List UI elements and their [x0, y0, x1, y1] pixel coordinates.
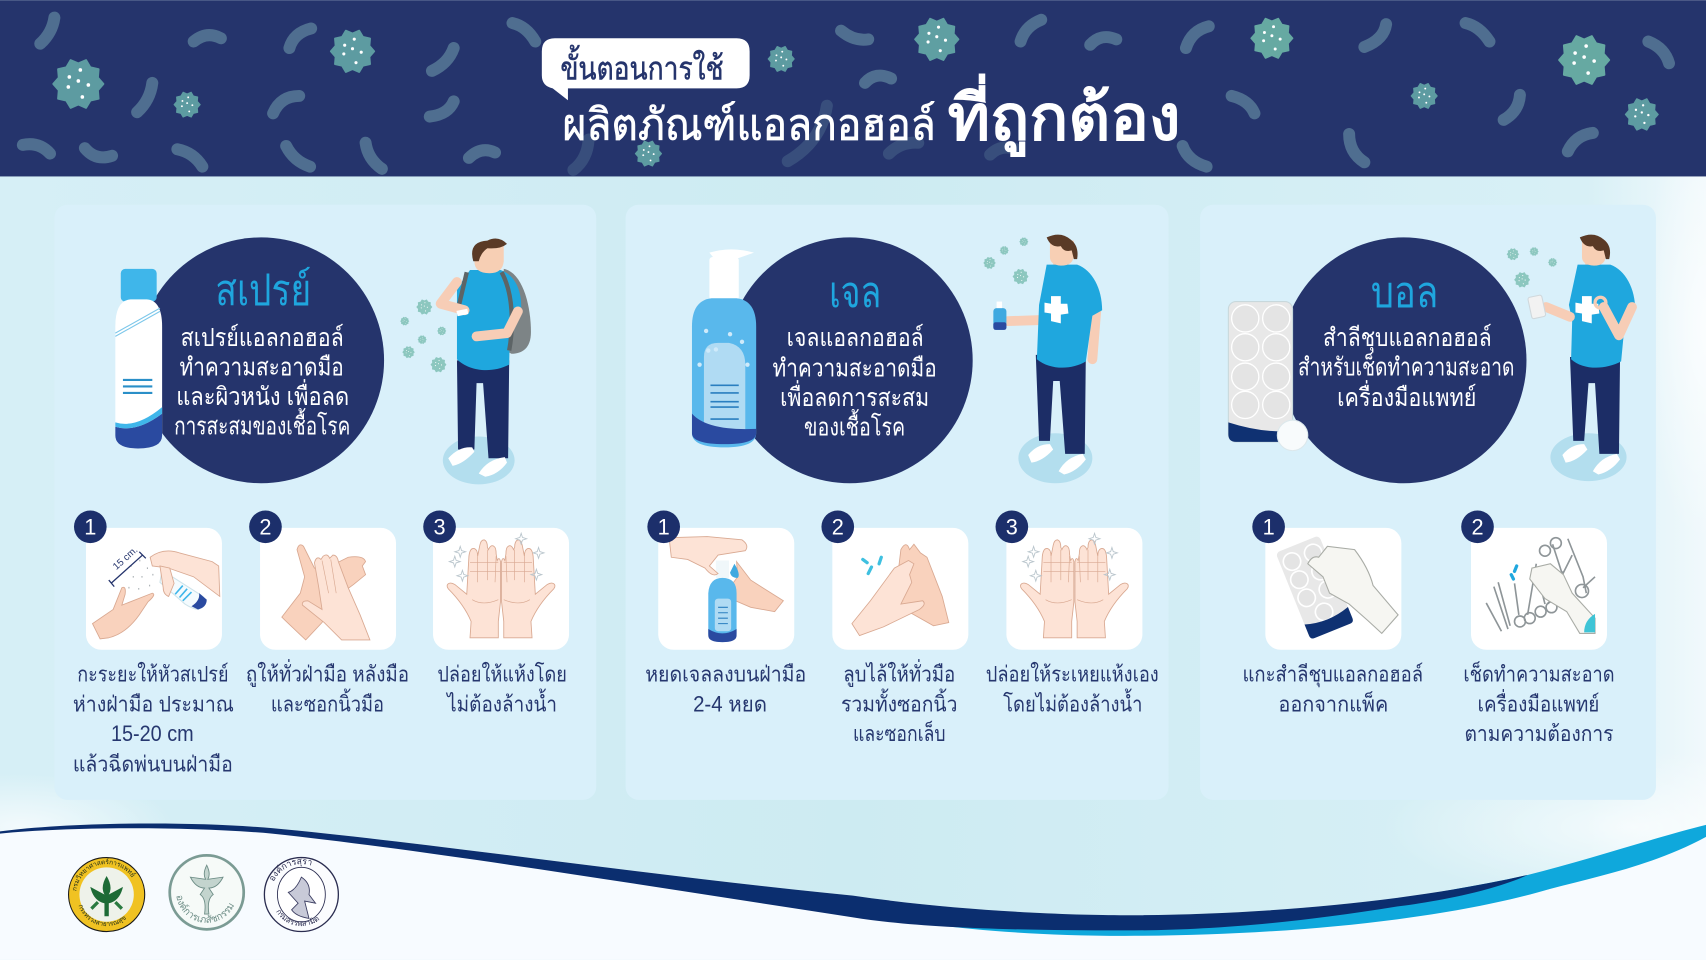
step card 2	[821, 510, 968, 650]
step text 2	[841, 659, 957, 746]
step text 1: ออกจากแพ็ค	[1278, 690, 1388, 717]
badge 1	[1252, 510, 1285, 543]
icon: gel pump bottle	[692, 249, 756, 447]
description: spray: และผิวหนัง เพื่อลด	[176, 379, 349, 411]
header banner	[0, 0, 1706, 176]
illustration: spray distance: 15 cm.	[111, 545, 140, 573]
badge 1	[647, 510, 680, 543]
badge 1: 1	[658, 514, 670, 539]
step text 2: เช็ดทำความสะอาด	[1463, 659, 1615, 686]
step text 2	[246, 659, 409, 717]
step text 1: ห่างฝ่ามือ ประมาณ	[73, 692, 234, 717]
icon: viruses	[53, 19, 1658, 166]
logo: department of medical sciences	[68, 857, 146, 932]
badge 3	[423, 510, 456, 543]
description: spray	[174, 324, 350, 440]
badge 2	[821, 510, 854, 543]
illustration: rubbing hands	[282, 545, 370, 640]
description: spray: สเปรย์แอลกอฮอล์	[181, 324, 344, 352]
heading: swab: บอล	[1371, 269, 1438, 317]
step text 2: รวมทั้งซอกนิ้ว	[841, 689, 957, 717]
illustration: open hands	[447, 533, 555, 638]
step text 3: ปล่อยให้แห้งโดย	[437, 661, 567, 686]
title tag: speech bubble: ขั้นตอนการใช้	[560, 45, 724, 87]
step card 1	[74, 510, 222, 650]
step card 3	[423, 510, 569, 650]
description: gel: ทำความสะอาดมือ	[772, 355, 937, 383]
badge 2: 2	[1471, 514, 1484, 539]
description: gel: เจลแอลกอฮอล์	[787, 324, 924, 352]
description: swab: เครื่องมือแพทย์	[1337, 380, 1476, 412]
icon: spray bottle	[115, 269, 162, 448]
logo: excise department: องค์การสุรา	[270, 858, 312, 881]
step text 2: ลูบไล้ให้ทั่วมือ	[843, 659, 955, 687]
footer wave	[0, 824, 1706, 960]
logo: government pharmaceutical organization: องค์การเภสัชกรรม	[176, 896, 234, 923]
step text 1: แกะสำลีชุบแอลกอฮอล์	[1243, 661, 1423, 687]
illustration: open hands	[1021, 533, 1128, 638]
title: ผลิตภัณฑ์แอลกอฮอล์	[563, 101, 936, 149]
illustration: man holding swab	[1528, 235, 1635, 481]
step text 1: 2-4 หยด	[693, 692, 767, 717]
description: gel: เพื่อลดการสะสม	[780, 380, 929, 412]
step text 3: โดยไม่ต้องล้างน้ำ	[1003, 689, 1142, 717]
step text 3: ปล่อยให้ระเหยแห้งเอง	[986, 661, 1159, 686]
title	[563, 73, 1180, 157]
step card 1	[647, 510, 794, 650]
panel: spray	[54, 205, 596, 800]
step text 1	[645, 661, 806, 717]
panel: alcohol swab	[1200, 205, 1656, 800]
icon: navy circle	[1281, 237, 1526, 483]
title: ที่ถูกต้อง	[948, 73, 1180, 157]
description: spray: ทำความสะอาดมือ	[180, 354, 344, 382]
illustration: spray distance	[92, 545, 220, 639]
logo: department of medical sciences: กระทรวงสาธารณสุข	[78, 904, 126, 926]
badge 3: 3	[434, 514, 446, 539]
badge 1: 1	[1263, 514, 1275, 539]
step text 1: 15-20 cm	[111, 721, 194, 746]
step text 1: กะระยะให้หัวสเปรย์	[77, 661, 228, 686]
panel: gel	[626, 205, 1169, 800]
heading: gel: เจล	[829, 269, 881, 317]
badge 3	[996, 510, 1028, 543]
step text 2: เครื่องมือแพทย์	[1478, 690, 1599, 717]
step text 2: และซอกเล็บ	[853, 719, 945, 746]
description: gel: ของเชื้อโรค	[804, 408, 905, 441]
step card 1	[1252, 510, 1401, 650]
title tag: speech bubble	[542, 38, 750, 100]
icon: small viruses	[984, 238, 1028, 284]
logo: government pharmaceutical organization	[168, 854, 246, 931]
illustration: opening swab pack	[1276, 535, 1398, 640]
illustration: wiping medical tools	[1486, 538, 1595, 633]
step text 1	[73, 661, 234, 777]
logo: excise department: กรมสรรพสามิต	[276, 910, 320, 926]
icon: swab blister pack	[1228, 302, 1308, 451]
description: spray: การสะสมของเชื้อโรค	[174, 407, 350, 440]
description: swab	[1298, 324, 1515, 412]
illustration: gel dispensing	[669, 537, 783, 642]
step text 2: ตามความต้องการ	[1464, 721, 1614, 746]
step text 3	[437, 661, 567, 717]
icon: small viruses	[400, 300, 446, 372]
description: swab: สำหรับเช็ดทำความสะอาด	[1298, 352, 1515, 382]
logo: excise department	[264, 856, 339, 932]
heading: spray: สเปรย์	[215, 267, 311, 315]
step text 2	[1463, 659, 1615, 746]
description: gel	[772, 324, 937, 441]
step text 3	[986, 661, 1159, 717]
description: swab: สำลีชุบแอลกอฮอล์	[1323, 324, 1492, 353]
badge 2: 2	[259, 514, 272, 539]
illustration: man spraying	[441, 239, 531, 484]
step card 2	[1461, 510, 1607, 650]
step card 2	[249, 510, 396, 650]
badge 3: 3	[1006, 514, 1018, 539]
step text 2: ถูให้ทั่วฝ่ามือ หลังมือ	[246, 659, 409, 687]
step text 1: หยดเจลลงบนฝ่ามือ	[645, 661, 806, 686]
step text 1: แล้วฉีดพ่นบนฝ่ามือ	[73, 752, 233, 777]
step text 2: และซอกนิ้วมือ	[271, 689, 384, 717]
badge 2	[249, 510, 282, 543]
icon: small viruses	[1507, 247, 1557, 287]
illustration: rubbing hands palms	[852, 544, 949, 636]
step text 3: ไม่ต้องล้างน้ำ	[445, 689, 557, 717]
icon: navy circle	[138, 237, 384, 483]
badge 2	[1461, 510, 1494, 543]
badge 2: 2	[832, 514, 844, 539]
badge 1: 1	[84, 514, 96, 539]
icon: navy circle	[727, 237, 973, 483]
badge 1	[74, 510, 107, 543]
logo: department of medical sciences: กรมวิทยาศาสตร์การแพทย์	[73, 858, 136, 891]
step text 1	[1243, 661, 1423, 717]
step card 3	[996, 510, 1142, 650]
illustration: man holding gel	[993, 235, 1102, 483]
